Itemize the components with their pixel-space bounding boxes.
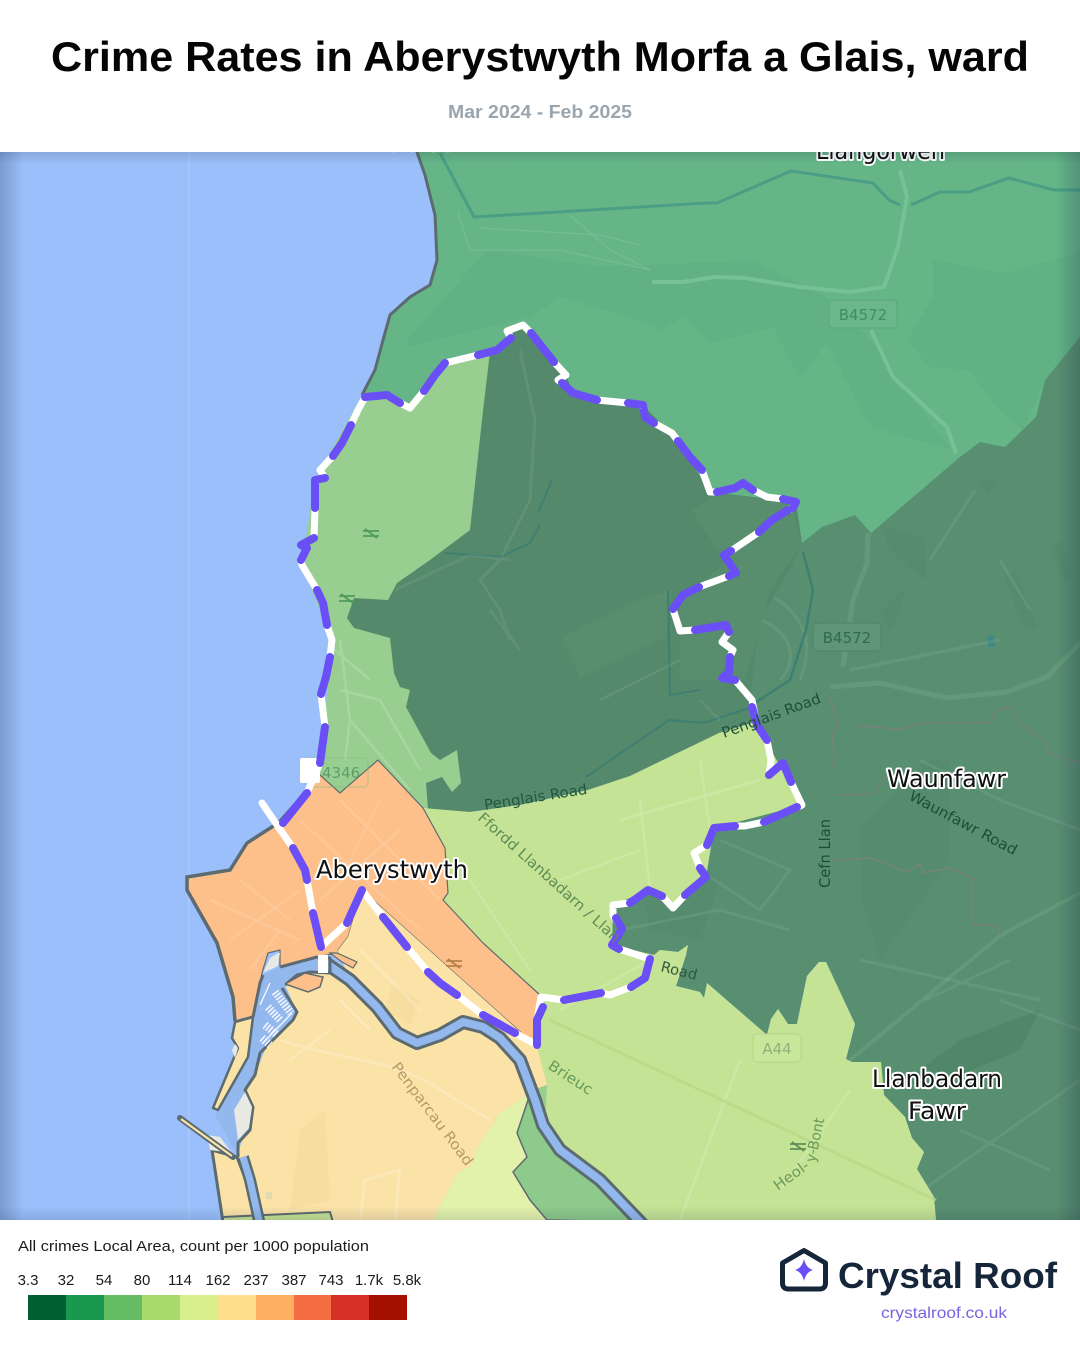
land base under the regions <box>306 396 547 1111</box>
road label: Waunfawr Road: Waunfawr Road <box>906 788 1020 859</box>
road shield: A44 <box>753 1034 801 1062</box>
logo wordmark: Crystal Roof <box>838 1255 1058 1296</box>
road label: Ffordd Llanbadarn: Ffordd Llanbadarn / Llan <box>474 810 623 946</box>
region: small orange patch south of river <box>285 973 323 992</box>
icon: railway station Aberystwyth north <box>339 594 355 603</box>
icon: house with star <box>782 1250 826 1289</box>
legend scale labels: 80 <box>134 1272 150 1289</box>
road label: Road: Road <box>659 959 699 984</box>
legend scale labels: 32 <box>58 1272 74 1289</box>
place label: Waunfawr: Waunfawr <box>887 765 1006 793</box>
road shield: B4572 east <box>813 623 881 651</box>
Rheidol harbour <box>215 967 297 1157</box>
road shield: B4346 <box>300 758 368 787</box>
region: southern green hill <box>512 1100 628 1220</box>
region: orange high-crime area <box>187 760 540 1047</box>
legend scale labels: 743 <box>318 1272 344 1289</box>
legend title: All crimes Local Area, count per 1000 population <box>18 1238 369 1255</box>
road shield: B4346: 4346 <box>322 764 360 782</box>
road label: Heol-y-Bont: Heol- <box>771 1158 813 1194</box>
legend scale labels: 5.8k <box>393 1272 422 1289</box>
harbour spit and breakwater <box>180 1017 253 1157</box>
region: orange sliver beside the river <box>330 953 357 968</box>
legend scale labels <box>18 1272 422 1289</box>
legend scale labels: 162 <box>205 1272 231 1289</box>
coastline outline <box>362 152 437 395</box>
legend colour scale <box>28 1295 407 1320</box>
region: northern green area <box>364 152 1080 543</box>
legend <box>18 1238 422 1320</box>
title: Crime Rates in Aberystwyth Morfa a Glais, ward <box>51 33 1029 80</box>
region: yellow-green area <box>423 722 936 1222</box>
legend scale labels: 54 <box>96 1272 112 1289</box>
Crystal Roof logo <box>782 1250 1058 1322</box>
subtitle: date range: Mar 2024 - Feb 2025 <box>448 102 632 122</box>
ward boundary: white casing and purple dashes <box>262 325 802 1045</box>
road label: Penparcau Road: Penparcau Road <box>388 1060 476 1169</box>
legend scale labels: 387 <box>281 1272 307 1289</box>
legend scale labels: 237 <box>243 1272 269 1289</box>
icon: railway station north <box>363 529 379 538</box>
road shield: B4572 north: B4572 <box>839 306 887 324</box>
icon: railway station Llanbadarn <box>790 1142 806 1151</box>
region: cream area south of the river <box>237 890 547 1220</box>
legend scale labels: 1.7k <box>355 1272 384 1289</box>
road label: Penglais Road east: Penglais Road <box>720 691 823 742</box>
map edge shading <box>0 152 1080 1220</box>
marina pontoons <box>260 983 292 1045</box>
region: southern pale green area <box>433 1096 546 1220</box>
place label: Aberystwyth: Aberystwyth <box>316 855 468 884</box>
region: western light green area <box>302 352 490 812</box>
legend scale labels: 3.3 <box>18 1272 38 1289</box>
legend scale labels: 114 <box>168 1272 192 1289</box>
region: Morfa a Glais dark green ward area <box>347 325 802 812</box>
road label: Heol-y-Bont continued: y-Bont <box>803 1116 828 1164</box>
road shield: B4572 north <box>829 300 897 328</box>
place label: Llangorwen: Llangorwen <box>816 137 945 165</box>
road shield: A44: A44 <box>762 1040 792 1058</box>
road label: Brieuc: Brieuc <box>545 1058 595 1099</box>
river <box>243 957 644 1226</box>
icon: railway station Aberystwyth <box>446 959 462 968</box>
sea <box>0 152 936 1220</box>
road label: Cefn Llan: Cefn Llan <box>816 819 834 888</box>
place label: Llanbadarn: Llanbadarn <box>872 1065 1002 1093</box>
place label: Fawr: Fawr <box>908 1097 966 1125</box>
website link: crystalroof.co.uk <box>881 1305 1008 1322</box>
region: eastern dark green area <box>600 337 1080 1220</box>
road label: Penglais Road west: Penglais Road <box>483 782 588 814</box>
road shield: B4572 east: B4572 <box>823 629 871 647</box>
sand patches <box>232 953 280 1140</box>
place label: Clarach: Clarach <box>386 131 466 156</box>
